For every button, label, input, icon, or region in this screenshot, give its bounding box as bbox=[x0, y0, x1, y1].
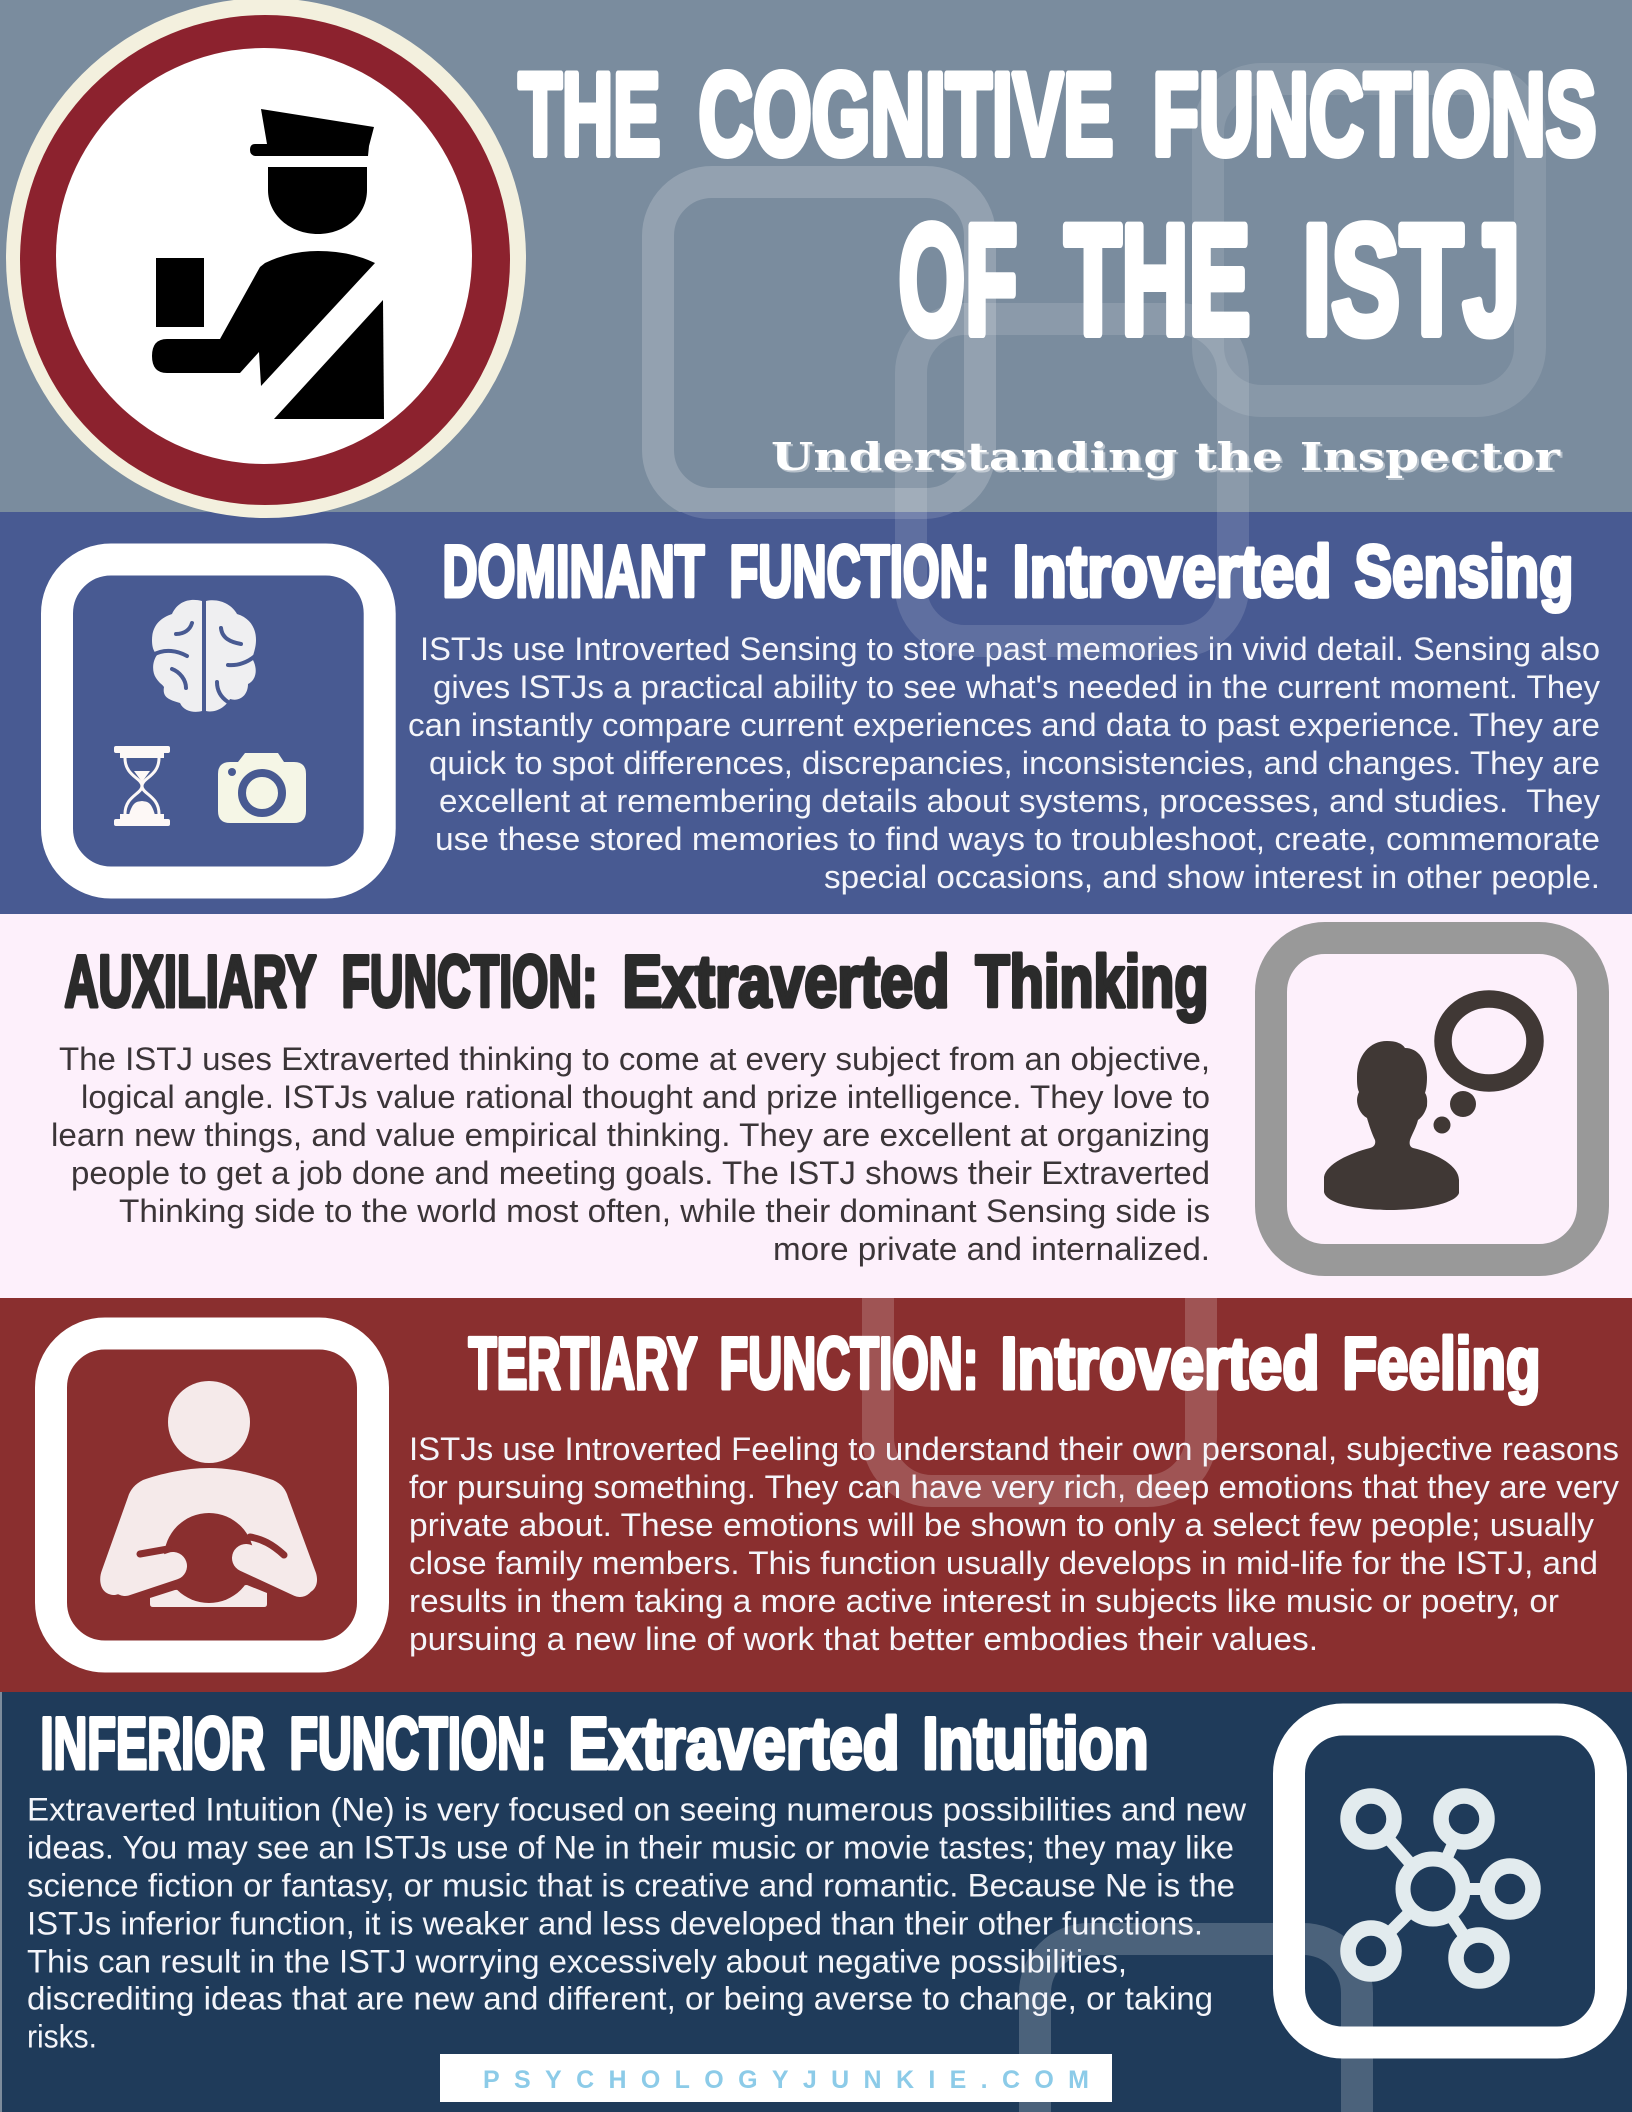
text: dominant function body: can instantly compare current experiences and data to past experience. They are bbox=[408, 707, 1600, 743]
icon: network nodes bbox=[1348, 1796, 1533, 1981]
text: tertiary function body: for pursuing something. They can have very rich, deep emotions that they are very bbox=[409, 1469, 1619, 1505]
heading: tertiary function: Feeling bbox=[1342, 1324, 1540, 1404]
text: tertiary function body: results in them taking a more active interest in subjects like music or poetry, or bbox=[409, 1583, 1559, 1619]
heading: tertiary function: TERTIARY bbox=[468, 1324, 698, 1404]
text: tertiary function body: pursuing a new line of work that better embodies their values. bbox=[409, 1621, 1318, 1657]
text: inferior function body: This can result in the ISTJ worrying excessively about negative possibilities, bbox=[27, 1944, 1127, 1980]
title: COGNITIVE bbox=[698, 48, 1114, 180]
icon: inspector badge bbox=[6, 0, 526, 518]
text: dominant function body: gives ISTJs a practical ability to see what's needed in the current moment. They bbox=[433, 669, 1600, 705]
icon: person thinking bbox=[1324, 999, 1535, 1210]
icon: camera bbox=[218, 753, 306, 823]
icon: brain bbox=[152, 600, 256, 712]
text: tertiary function body: close family members. This function usually develops in mid-life for the ISTJ, and bbox=[409, 1545, 1598, 1581]
heading: tertiary function bbox=[468, 1324, 1540, 1404]
footer: website label: PSYCHOLOGYJUNKIE.COM bbox=[483, 2066, 1089, 2094]
text: dominant function body: quick to spot differences, discrepancies, inconsistencies, and changes. They are bbox=[429, 745, 1600, 781]
heading: auxiliary function: Extraverted bbox=[622, 942, 950, 1022]
heading: inferior function: FUNCTION: bbox=[290, 1704, 546, 1784]
title: THE bbox=[518, 48, 660, 180]
text: inferior function body: discrediting ideas that are new and different, or being averse to change, or taking bbox=[27, 1980, 1213, 2016]
icon frame: inferior bbox=[1289, 1720, 1611, 2042]
text: auxiliary function body: The ISTJ uses Extraverted thinking to come at every subject from an objective, bbox=[59, 1041, 1210, 1077]
icon frame: dominant bbox=[57, 560, 380, 882]
text: tertiary function body bbox=[409, 1431, 1619, 1657]
heading: tertiary function: Introverted bbox=[1000, 1324, 1320, 1404]
text: inferior function body: risks. bbox=[27, 2018, 97, 2054]
icon frame: auxiliary bbox=[1271, 938, 1593, 1260]
heading: dominant function: DOMINANT bbox=[442, 532, 704, 612]
text: auxiliary function body: learn new things, and value empirical thinking. They are excellent at organizing bbox=[51, 1117, 1210, 1153]
heading: auxiliary function bbox=[64, 942, 1208, 1022]
text: inferior function body: science fiction or fantasy, or music that is creative and romantic. Because Ne is the bbox=[27, 1868, 1235, 1904]
text: inferior function body: ideas. You may see an ISTJs use of Ne in their music or movie tastes; they may like bbox=[27, 1830, 1234, 1866]
text: auxiliary function body: people to get a job done and meeting goals. The ISTJ shows their Extraverted bbox=[71, 1155, 1210, 1191]
text: tertiary function body: ISTJs use Introverted Feeling to understand their own personal, subjective reasons bbox=[409, 1431, 1619, 1467]
heading: dominant function: Introverted bbox=[1012, 532, 1332, 612]
icon: hourglass bbox=[114, 746, 170, 826]
heading: dominant function: FUNCTION: bbox=[730, 532, 990, 612]
text: tertiary function body: private about. These emotions will be shown to only a select few people; usually bbox=[409, 1507, 1594, 1543]
icon: driver bbox=[100, 1381, 317, 1607]
heading: dominant function: Sensing bbox=[1354, 532, 1574, 612]
panel: inferior function bbox=[0, 1692, 1632, 2112]
subtitle: Understanding the Inspector bbox=[771, 434, 1561, 479]
text: inferior function body bbox=[27, 1792, 1247, 2054]
text: auxiliary function body: more private and internalized. bbox=[773, 1231, 1210, 1267]
footer: website label bbox=[440, 2054, 1112, 2102]
heading: inferior function bbox=[40, 1704, 1148, 1784]
text: dominant function body: special occasions, and show interest in other people. bbox=[824, 859, 1600, 895]
heading: tertiary function: FUNCTION: bbox=[720, 1324, 978, 1404]
heading: inferior function: INFERIOR bbox=[40, 1704, 264, 1784]
panel: dominant function bbox=[0, 512, 1632, 914]
heading: auxiliary function: Thinking bbox=[976, 942, 1208, 1022]
heading: inferior function: Intuition bbox=[922, 1704, 1148, 1784]
heading: auxiliary function: FUNCTION: bbox=[342, 942, 598, 1022]
icon: inspector figure bbox=[152, 109, 384, 419]
heading: auxiliary function: AUXILIARY bbox=[64, 942, 316, 1022]
panel: tertiary function bbox=[0, 1298, 1632, 1692]
heading: dominant function bbox=[442, 532, 1574, 612]
text: auxiliary function body bbox=[51, 1041, 1210, 1267]
text: inferior function body: ISTJs inferior function, it is weaker and less developed than their other functions. bbox=[27, 1906, 1203, 1942]
panel: header bbox=[0, 0, 1632, 512]
text: auxiliary function body: Thinking side to the world most often, while their dominant Sensing side is bbox=[119, 1193, 1210, 1229]
heading: inferior function: Extraverted bbox=[568, 1704, 900, 1784]
title: OF bbox=[898, 194, 1018, 368]
title: THE bbox=[1064, 194, 1250, 368]
text: dominant function body: excellent at remembering details about systems, processes, and studies. They bbox=[439, 783, 1600, 819]
icon frame: tertiary bbox=[51, 1334, 373, 1656]
panel: auxiliary function bbox=[0, 914, 1632, 1298]
text: auxiliary function body: logical angle. ISTJs value rational thought and prize intelligence. They love to bbox=[81, 1079, 1210, 1115]
text: dominant function body: use these stored memories to find ways to troubleshoot, create, commemorate bbox=[435, 821, 1600, 857]
title: ISTJ bbox=[1302, 194, 1520, 368]
text: dominant function body bbox=[408, 631, 1600, 895]
text: inferior function body: Extraverted Intuition (Ne) is very focused on seeing numerous possibilities and new bbox=[27, 1792, 1247, 1828]
text: dominant function body: ISTJs use Introverted Sensing to store past memories in vivid detail. Sensing also bbox=[420, 631, 1600, 667]
title bbox=[518, 48, 1596, 368]
